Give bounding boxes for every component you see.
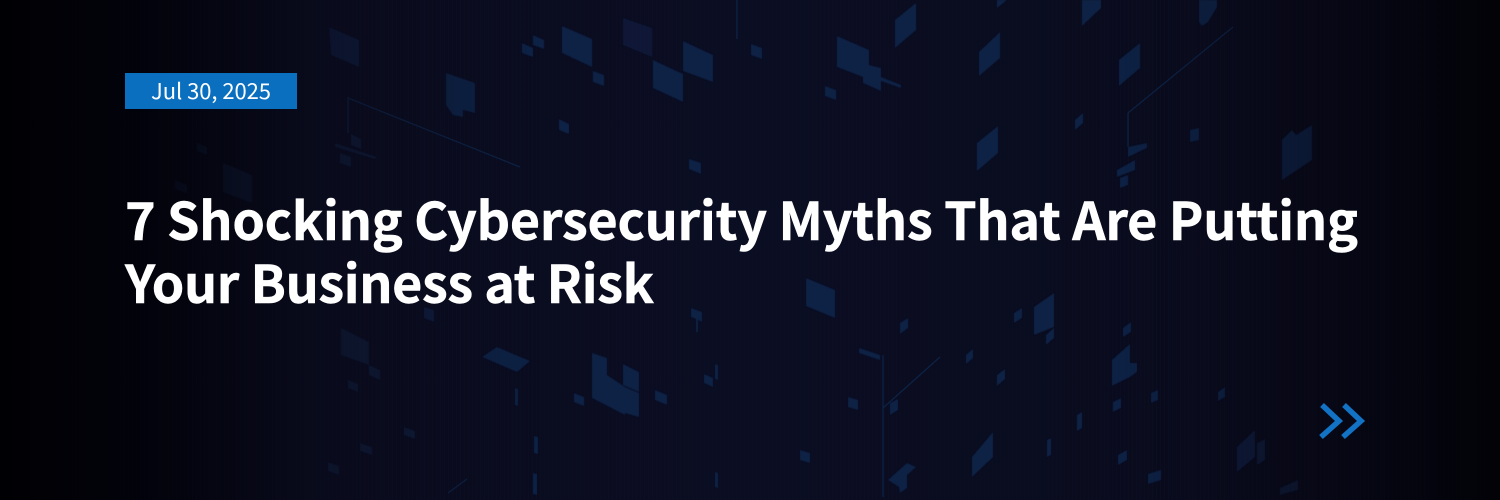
icon: double chevron arrow <box>1321 405 1361 437</box>
title: 7 Shocking Cybersecurity Myths That Are Putting <box>125 180 1358 255</box>
title <box>124 180 1358 318</box>
date badge: Jul 30, 2025 <box>151 74 271 106</box>
decorative circuit lines <box>348 0 1233 497</box>
decorative data panels <box>175 0 1312 495</box>
title: Your Business at Risk <box>124 243 655 318</box>
date badge <box>125 73 297 109</box>
